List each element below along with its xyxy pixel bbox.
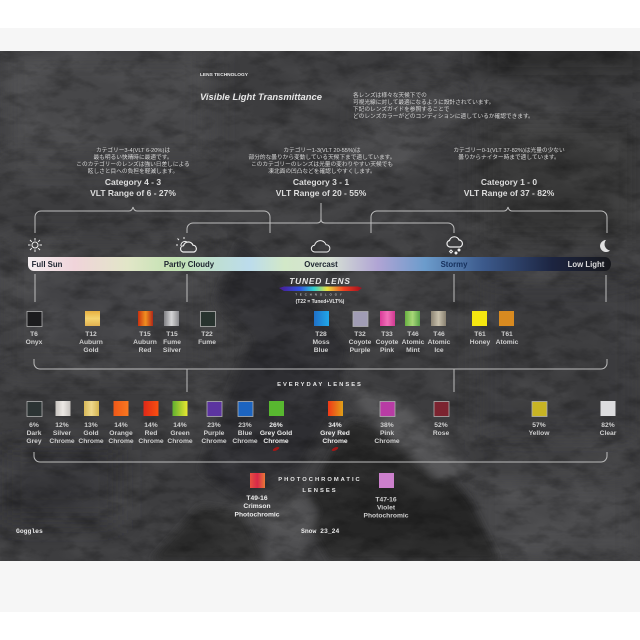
swatch: T15 Auburn Red: [133, 311, 157, 354]
swatch: T6 Onyx: [26, 312, 43, 346]
swatch: 34% Grey Red Chrome: Chrome: [322, 438, 348, 445]
swatch: 26% Grey Gold Chrome: Grey Gold: [260, 430, 292, 437]
swatch: 13% Gold Chrome: Chrome: [78, 438, 104, 445]
swatch: 57% Yellow: Yellow: [529, 430, 550, 437]
category 3-1 description: 凍北面の凹凸などを確認しやすくします。: [268, 167, 376, 175]
swatch: 14% Orange Chrome: [108, 401, 134, 445]
intro text block: 各レンズは様々な天候下での: [353, 91, 427, 99]
intro text block: 可視光線に対して最適になるように設計されています。: [353, 98, 494, 106]
category 1-0 heading: VLT Range of 37 - 82%: [464, 188, 555, 198]
swatch: 6% Dark Grey: Dark: [27, 430, 42, 437]
intro text block: [353, 91, 534, 120]
swatch: T47-16 Violet Photochromic: [364, 473, 409, 520]
category 4-3 heading: [90, 177, 176, 198]
swatch: 23% Blue Chrome: 23%: [238, 422, 252, 429]
category 4-3 description: 最も明るい快晴時に最適です。: [93, 153, 173, 161]
swatch: 38% Pink Chrome: Chrome: [374, 438, 400, 445]
swatch: 12% Silver Chrome: 12%: [55, 422, 69, 429]
swatch: T61 Atomic: [496, 311, 519, 346]
swatch: 26% Grey Gold Chrome: Chrome: [263, 438, 289, 445]
icon: cloud: [311, 241, 330, 252]
category 1-0 description: 曇りからナイター時まで適しています。: [458, 153, 560, 161]
category 1-0 description: [453, 146, 565, 161]
swatch: T32 Coyote Purple: T32: [354, 331, 366, 338]
swatch: 14% Orange Chrome: Orange: [109, 430, 133, 437]
swatch: 14% Green Chrome: Green: [170, 430, 190, 437]
swatch: T15 Auburn Red: T15: [139, 331, 151, 338]
swatch: 14% Orange Chrome: Chrome: [108, 438, 134, 445]
swatch: T33 Coyote Pink: Pink: [380, 347, 394, 354]
swatch: T33 Coyote Pink: [376, 311, 399, 354]
heading: photochromatic lenses: LENSES: [302, 488, 338, 494]
heading: everyday lenses: EVERYDAY LENSES: [277, 382, 363, 388]
swatch: 82% Clear: Clear: [600, 430, 617, 437]
tuned lens row: [26, 311, 519, 354]
swatch: T47-16 Violet Photochromic: T47-16: [375, 496, 397, 504]
swatch: 82% Clear: 82%: [601, 422, 615, 429]
swatch: 23% Purple Chrome: Purple: [204, 430, 225, 437]
category 1-0 heading: [464, 177, 555, 198]
swatch: 38% Pink Chrome: [374, 402, 400, 445]
category 3-1 heading: VLT Range of 20 - 55%: [276, 188, 367, 198]
swatch: 52% Rose: 52%: [434, 422, 448, 429]
category 1-0 heading: Category 1 - 0: [481, 177, 537, 187]
swatch: T49-16 Crimson Photochromic: T49-16: [246, 495, 268, 502]
category 4-3 description: [76, 146, 190, 175]
swatch: 6% Dark Grey: 6%: [29, 422, 39, 429]
category 4-3 description: カテゴリー3-4(VLT 6-20%)は: [96, 146, 170, 154]
swatch: T22 Fume: [198, 312, 216, 346]
swatch: 52% Rose: Rose: [433, 430, 449, 437]
everyday lens row: [26, 401, 617, 452]
swatch: T46 Atomic Mint: Mint: [406, 347, 421, 354]
swatch: 34% Grey Red Chrome: Grey Red: [320, 430, 350, 437]
swatch: 6% Dark Grey: [26, 402, 42, 445]
swatch: 38% Pink Chrome: 38%: [380, 422, 394, 429]
icon: storm cloud: [447, 237, 462, 254]
swatch: T6 Onyx: Onyx: [26, 339, 43, 346]
swatch: 26% Grey Gold Chrome: [260, 401, 292, 452]
swatch: T46 Atomic Ice: Atomic: [428, 339, 451, 346]
icon: sun: [28, 238, 42, 252]
title: Visible Light Transmittance: [200, 91, 322, 102]
swatch: 14% Red Chrome: Red: [145, 430, 157, 437]
swatch: 14% Red Chrome: [138, 401, 164, 445]
swatch: 12% Silver Chrome: [49, 401, 75, 445]
spectrum bar: Partly Cloudy: [164, 260, 215, 269]
swatch: T49-16 Crimson Photochromic: Photochromic: [235, 512, 280, 518]
swatch: 34% Grey Red Chrome: 34%: [328, 422, 342, 429]
swatch: 12% Silver Chrome: Chrome: [49, 438, 75, 445]
icon: partly cloudy: [176, 237, 196, 252]
category 4-3 heading: Category 4 - 3: [105, 177, 161, 187]
swatch: 14% Green Chrome: 14%: [173, 422, 187, 429]
footer label: snow season: Snow 23_24: [301, 528, 340, 535]
section label: lens technology: LENS TECHNOLOGY: [200, 72, 249, 78]
swatch: T46 Atomic Ice: Ice: [434, 347, 444, 354]
spectrum bar: [28, 257, 611, 271]
swatch: T12 Auburn Gold: [79, 311, 103, 354]
spectrum bar: Full Sun: [32, 260, 63, 269]
swatch: 38% Pink Chrome: Pink: [380, 430, 394, 437]
heading: photochromatic lenses: [278, 477, 362, 494]
swatch: T15 Auburn Red: Red: [139, 347, 151, 354]
swatch: 14% Orange Chrome: 14%: [114, 422, 128, 429]
swatch: T28 Moss Blue: Moss: [312, 339, 330, 346]
category 3-1 description: [249, 146, 395, 175]
swatch: T61 Honey: [470, 311, 490, 346]
swatch: T28 Moss Blue: T28: [315, 331, 327, 338]
swatch: 13% Gold Chrome: Gold: [83, 430, 99, 437]
category 3-1 description: このカテゴリーのレンズは光量の変わりやすい天候でも: [251, 160, 393, 168]
swatch: T32 Coyote Purple: [349, 312, 372, 354]
swatch: T46 Atomic Ice: T46: [433, 331, 445, 338]
tuned lens logo: (T22 = Tuned+VLT%): [296, 299, 345, 305]
icon: moon: [600, 240, 610, 252]
swatch: T61 Honey: T61: [474, 331, 486, 338]
swatch: T12 Auburn Gold: T12: [85, 331, 97, 338]
tuned lens logo: TUNED LENS: [289, 276, 351, 286]
swatch: T15 Fume Silver: Silver: [163, 347, 182, 354]
swatch: T61 Honey: Honey: [470, 339, 490, 346]
swatch: T49-16 Crimson Photochromic: [235, 473, 280, 518]
swatch: 13% Gold Chrome: [78, 401, 104, 445]
swatch: 23% Purple Chrome: [201, 402, 227, 445]
footer label: goggles: Goggles: [16, 528, 43, 535]
swatch: T61 Atomic: Atomic: [496, 339, 519, 346]
swatch: 23% Purple Chrome: 23%: [207, 422, 221, 429]
swatch: T46 Atomic Mint: T46: [407, 331, 419, 338]
bracket: category 1-0: [371, 207, 607, 233]
spectrum bar: Stormy: [441, 260, 468, 269]
swatch: 23% Blue Chrome: Chrome: [232, 438, 258, 445]
spectrum bar: Low Light: [568, 260, 605, 269]
intro text block: 下記のレンズガイドを参照することで: [353, 105, 450, 113]
swatch: T15 Auburn Red: Auburn: [133, 339, 157, 346]
swatch: 14% Red Chrome: Chrome: [138, 438, 164, 445]
swatch: T49-16 Crimson Photochromic: Crimson: [243, 503, 271, 510]
swatch: T6 Onyx: T6: [30, 331, 38, 338]
category 1-0 description: カテゴリー0-1(VLT 37-82%)は光量の少ない: [453, 146, 565, 154]
swatch: T46 Atomic Ice: [428, 311, 451, 354]
swatch: T47-16 Violet Photochromic: Violet: [377, 504, 396, 512]
category 4-3 description: このカテゴリーのレンズは強い日差しによる: [76, 160, 190, 168]
swatch: T33 Coyote Pink: T33: [381, 331, 393, 338]
swatch: T12 Auburn Gold: Auburn: [79, 339, 103, 346]
heading: photochromatic lenses: PHOTOCHROMATIC: [278, 477, 362, 483]
swatch: T15 Fume Silver: T15: [166, 331, 178, 338]
bracket: category 4-3: [35, 207, 270, 233]
tuned lens logo: TECHNOLOGY: [295, 292, 345, 296]
category 3-1 heading: Category 3 - 1: [293, 177, 349, 187]
spectrum bar: Overcast: [304, 260, 338, 269]
swatch: T32 Coyote Purple: Coyote: [349, 339, 372, 346]
swatch: 52% Rose: [433, 402, 449, 437]
intro text block: どのレンズカラーがどのコンディションに適しているか確認できます。: [353, 112, 534, 120]
swatch: 26% Grey Gold Chrome: 26%: [269, 422, 283, 429]
swatch: 6% Dark Grey: Grey: [26, 438, 42, 445]
swatch: 57% Yellow: 57%: [532, 422, 546, 429]
swatch: 82% Clear: [600, 401, 617, 437]
category 3-1 description: 部分的な曇りから変動している天候下まで適しています。: [249, 153, 395, 161]
category 3-1 heading: [276, 177, 367, 198]
swatch: T28 Moss Blue: [312, 311, 330, 354]
swatch: T46 Atomic Mint: Atomic: [402, 339, 425, 346]
swatch: 23% Purple Chrome: Chrome: [201, 438, 227, 445]
swatch: T46 Atomic Mint: [402, 311, 425, 354]
bracket: category 3-1: [187, 203, 454, 233]
swatch: T32 Coyote Purple: Purple: [350, 347, 371, 354]
swatch: T22 Fume: T22: [201, 331, 213, 338]
swatch: T61 Atomic: T61: [501, 331, 513, 338]
swatch: T28 Moss Blue: Blue: [314, 347, 329, 354]
swatch: 34% Grey Red Chrome: [320, 401, 350, 452]
bracket under everyday lenses: [34, 452, 607, 462]
swatch: 57% Yellow: [529, 402, 550, 437]
category 3-1 description: カテゴリー1-3(VLT 20-55%)は: [283, 146, 361, 154]
category 4-3 heading: VLT Range of 6 - 27%: [90, 188, 176, 198]
tuned lens logo: [279, 276, 362, 305]
swatch: T15 Fume Silver: Fume: [163, 339, 181, 346]
connector lines from bar to tuned lenses: [35, 274, 606, 302]
swatch: 23% Blue Chrome: Blue: [238, 430, 253, 437]
swatch: T22 Fume: Fume: [198, 339, 216, 346]
swatch: T15 Fume Silver: [163, 311, 182, 354]
swatch: 23% Blue Chrome: [232, 402, 258, 445]
swatch: 12% Silver Chrome: Silver: [53, 430, 72, 437]
swatch: 14% Green Chrome: Chrome: [167, 438, 193, 445]
swatch: 13% Gold Chrome: 13%: [84, 422, 98, 429]
category 4-3 description: 眩しさと目への負担を軽減します。: [88, 167, 178, 175]
swatch: T12 Auburn Gold: Gold: [83, 347, 99, 354]
bracket under tuned lenses: [34, 359, 607, 392]
swatch: T47-16 Violet Photochromic: Photochromic: [364, 512, 409, 520]
swatch: 14% Green Chrome: [167, 401, 193, 445]
swatch: 14% Red Chrome: 14%: [144, 422, 158, 429]
swatch: T33 Coyote Pink: Coyote: [376, 339, 399, 346]
